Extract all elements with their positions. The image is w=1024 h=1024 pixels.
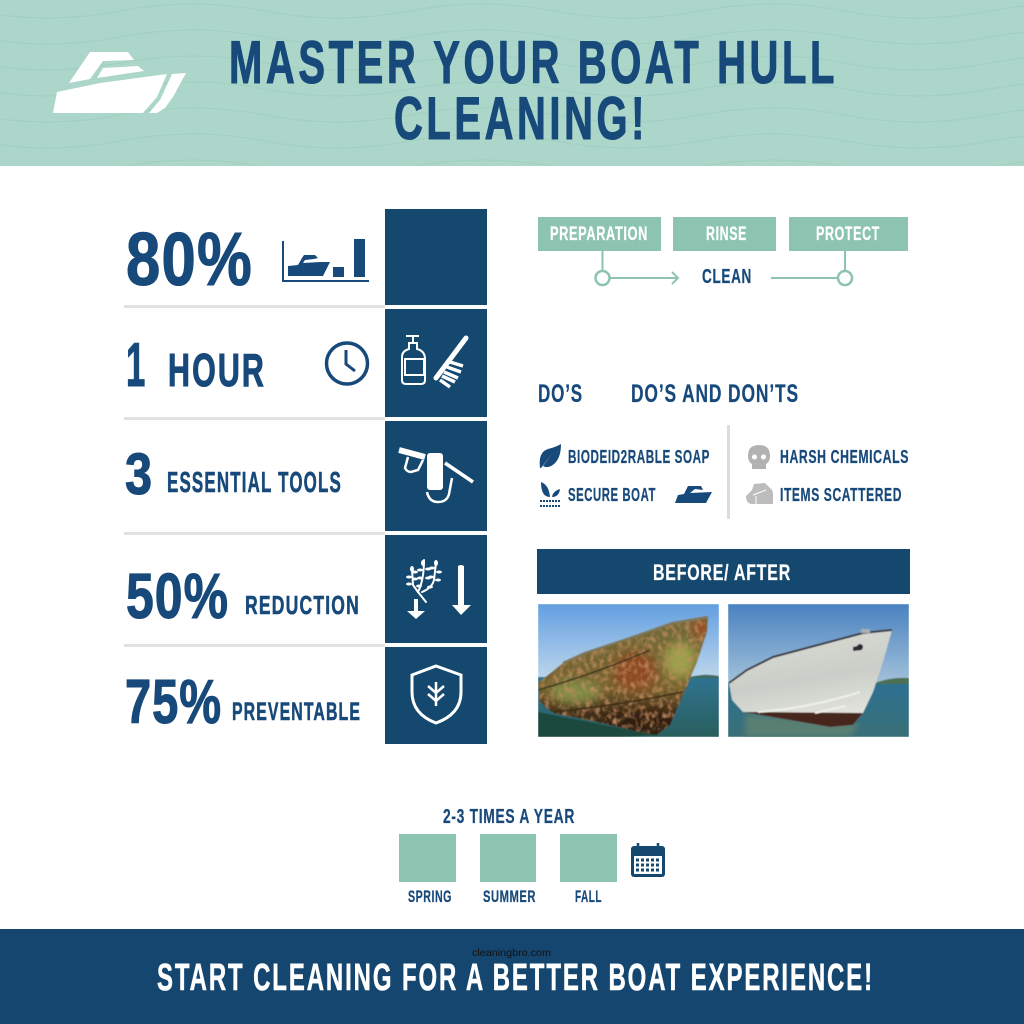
stat: 1 hour: 1 [126,331,146,400]
stat: 1 hour [126,331,266,400]
stat: 80%: 80% [126,217,253,301]
stat: 3 essential tools [125,442,342,507]
heading bar [537,549,910,594]
don't: items scattered: ITEMS SCATTERED [780,485,902,505]
heading: DO’S [538,380,583,408]
season: spring: SPRING [408,887,452,906]
step: rinse: RINSE [706,224,747,245]
stat: 1 hour: HOUR [168,344,266,396]
panel: cleaning schedule [399,806,665,906]
icon: white yacht [53,52,186,113]
stat: 50% reduction [126,560,360,632]
step: rinse [673,217,776,251]
heading [538,380,799,408]
don't: harsh chemicals: HARSH CHEMICALS [780,447,909,467]
photo: clean hull [728,604,909,737]
website credit: cleaningbro.com [472,947,551,959]
heading: 2-3 TIMES A YEAR [443,806,575,828]
panel: cleaning process flow [538,217,908,288]
panel: do's and don'ts [538,380,909,519]
do: secure boat: SECURE BOAT [568,485,656,505]
panel: before and after [537,549,910,737]
stat: 75% preventable: 75% [125,668,222,737]
icon: pressure washer [399,450,473,502]
stat: 3 essential tools: 3 [125,442,153,507]
icon: boat bar chart [282,239,369,282]
icon: soap and brush [402,336,466,387]
photo: fouled hull [538,604,719,737]
stat: 50% reduction: 50% [126,560,229,632]
season: fall: FALL [575,887,602,906]
heading bar: BEFORE/ AFTER [653,560,791,585]
step: protect: PROTECT [816,224,880,245]
do: biodegradable soap: BIODEID2RABLE SOAP [568,447,710,467]
stat: 75% preventable: PREVENTABLE [232,698,361,726]
stat: 50% reduction: REDUCTION [245,590,360,620]
title [229,29,838,152]
stat: 3 essential tools: ESSENTIAL TOOLS [167,467,342,499]
step: protect [789,217,908,251]
season: summer: SUMMER [483,887,536,906]
season: summer [480,834,536,906]
stat: 75% preventable [125,668,361,737]
season: fall [560,834,617,906]
season: spring [399,834,456,906]
connector line right [771,251,852,285]
step: preparation [538,217,661,251]
don't: items scattered [746,483,902,505]
stat blocks column [385,209,487,744]
step: clean: CLEAN [702,266,752,288]
icon: shield [412,666,461,723]
panel: key statistics [124,209,487,744]
do: secure boat [540,482,712,506]
footer banner [0,929,1024,1024]
icon: calendar [631,843,665,877]
don't: harsh chemicals [748,445,909,469]
icon: clock [326,343,368,384]
step: preparation: PREPARATION [550,224,648,245]
do: biodegradable soap [540,444,710,468]
heading: DO’S AND DON’TS [631,380,799,408]
connector arrow left [596,251,678,285]
title: CLEANING! [394,85,648,152]
header banner [0,0,1024,166]
icon: seaweed and down arrows [406,560,471,619]
